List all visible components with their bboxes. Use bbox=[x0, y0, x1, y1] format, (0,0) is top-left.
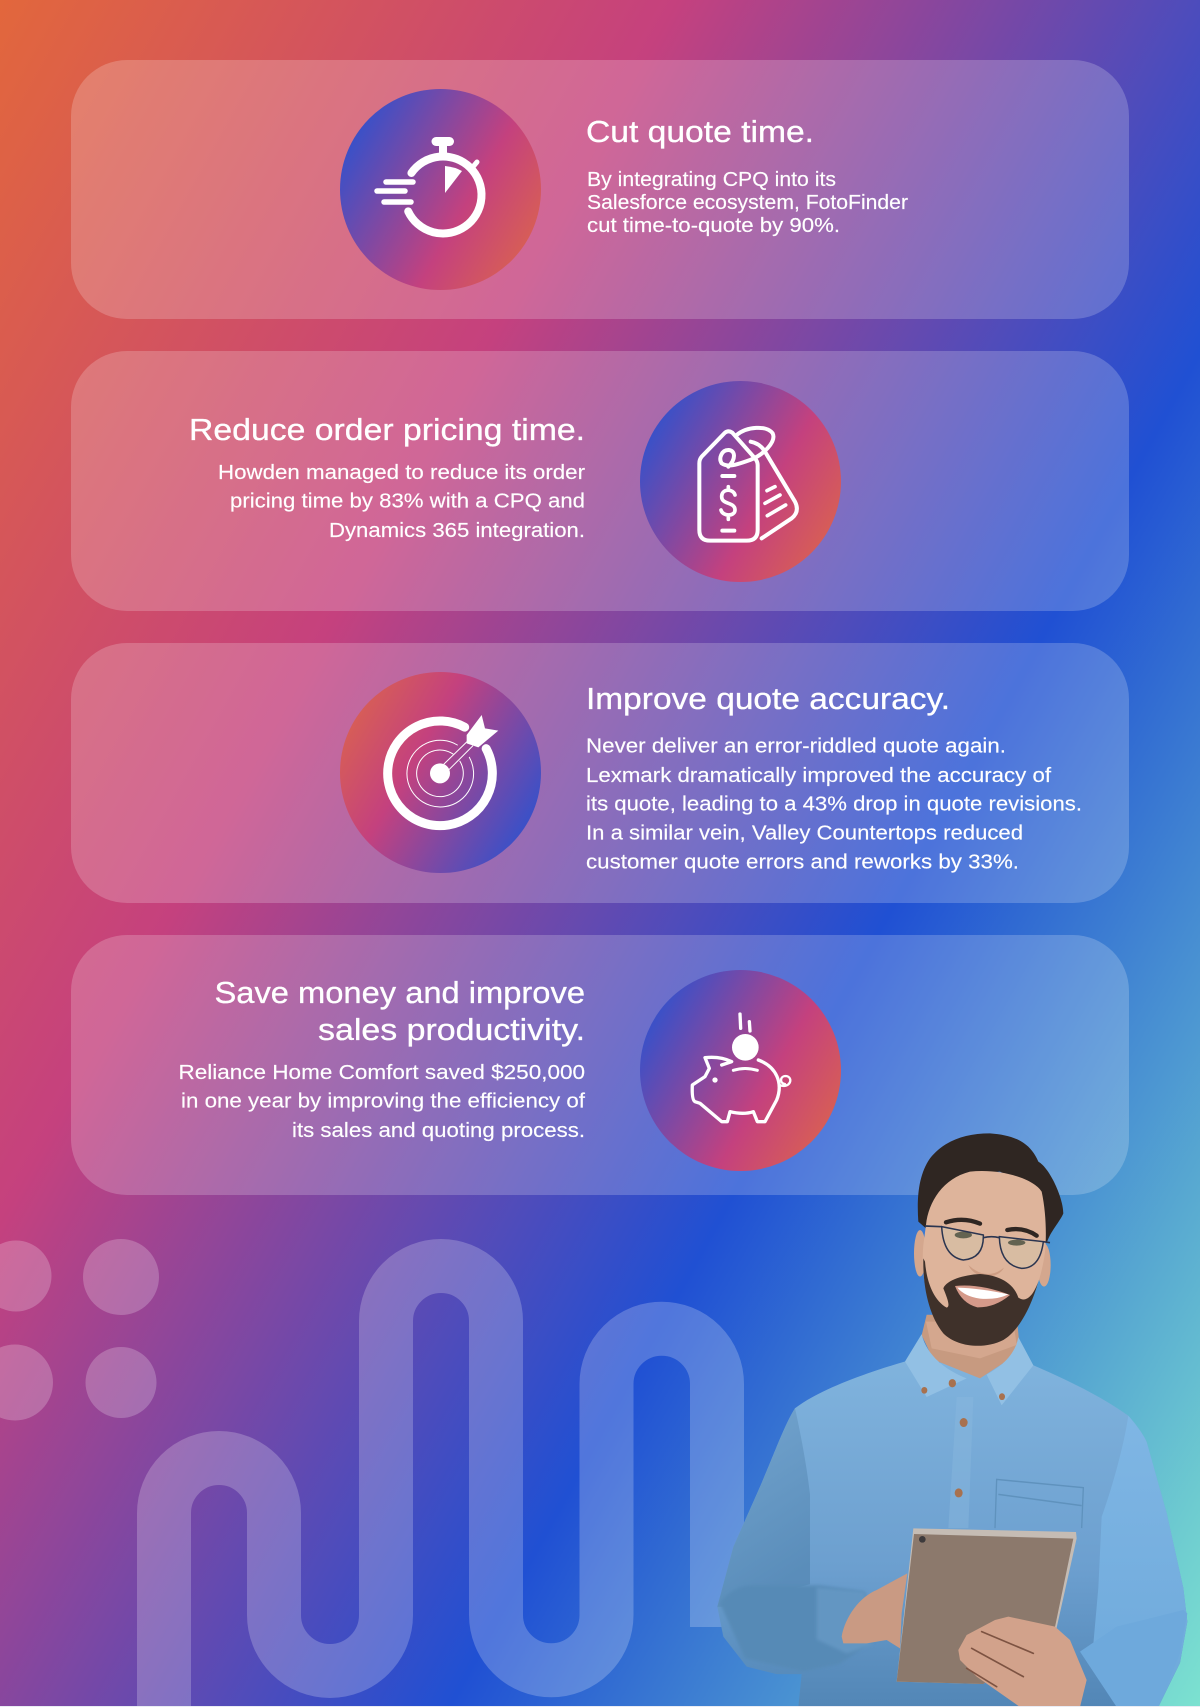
heading bbox=[214, 976, 585, 1047]
heading: Reduce order pricing time. bbox=[189, 413, 585, 447]
panel: reduce order pricing time bbox=[71, 351, 1129, 611]
icon: price tags bbox=[640, 381, 841, 582]
panel: save money and improve sales productivity bbox=[71, 935, 1129, 1195]
shirt torso and sleeves bbox=[717, 1315, 1187, 1707]
icon: target with arrow bbox=[340, 672, 541, 873]
heading: sales productivity. bbox=[318, 1013, 585, 1047]
panel card bbox=[71, 351, 1129, 611]
panel: improve quote accuracy bbox=[71, 643, 1129, 903]
decorative wave ribbon bbox=[164, 1266, 717, 1707]
body text bbox=[178, 1061, 585, 1142]
icon: stopwatch bbox=[340, 89, 541, 290]
decorative dots bbox=[0, 1239, 159, 1420]
bottom edge line bbox=[0, 1706, 1200, 1707]
panel card bbox=[71, 643, 1129, 903]
forearms, tablet and hands bbox=[720, 1528, 1187, 1707]
body text: its sales and quoting process. bbox=[292, 1119, 585, 1142]
body text: In a similar vein, Valley Countertops reduced bbox=[586, 822, 1023, 844]
body text: Lexmark dramatically improved the accuracy of bbox=[586, 764, 1051, 787]
body text: Howden managed to reduce its order bbox=[218, 461, 585, 484]
panel: cut quote time bbox=[71, 60, 1129, 319]
body text bbox=[218, 461, 585, 542]
person holding tablet bbox=[717, 1133, 1187, 1707]
body text: Reliance Home Comfort saved $250,000 bbox=[178, 1061, 585, 1084]
body text bbox=[586, 734, 1082, 874]
body text: its quote, leading to a 43% drop in quote revisions. bbox=[586, 792, 1082, 816]
body text: pricing time by 83% with a CPQ and bbox=[230, 490, 585, 512]
body text: customer quote errors and reworks by 33%. bbox=[586, 850, 1019, 874]
body text: Never deliver an error-riddled quote again. bbox=[586, 734, 1006, 758]
body text: Salesforce ecosystem, FotoFinder bbox=[587, 191, 908, 214]
icon: piggy bank bbox=[640, 970, 841, 1171]
panel card bbox=[71, 60, 1129, 319]
body text: Dynamics 365 integration. bbox=[329, 519, 585, 542]
heading: Cut quote time. bbox=[586, 115, 814, 149]
body text: By integrating CPQ into its bbox=[587, 168, 836, 191]
body text: cut time-to-quote by 90%. bbox=[587, 214, 840, 237]
body text: in one year by improving the efficiency of bbox=[181, 1090, 585, 1112]
body text bbox=[587, 168, 908, 237]
panel card bbox=[71, 935, 1129, 1195]
head bbox=[914, 1133, 1063, 1358]
heading: Save money and improve bbox=[214, 976, 585, 1010]
heading: Improve quote accuracy. bbox=[586, 682, 950, 716]
